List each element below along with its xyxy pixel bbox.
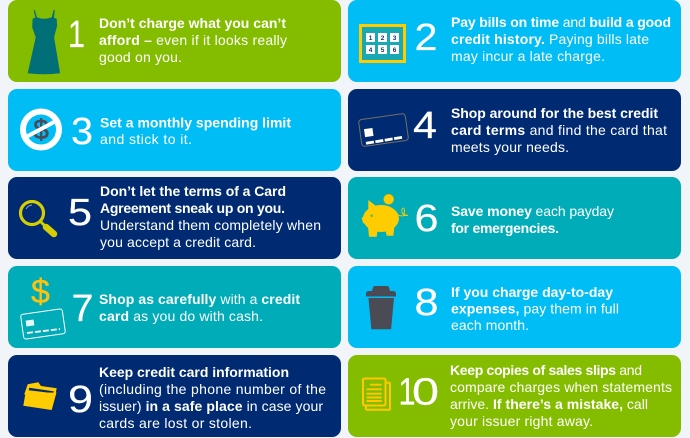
tip text 5: Understand them completely when (100, 217, 321, 233)
icon: keypad: 4 (369, 47, 373, 54)
tip text 9: Keep credit card information (99, 364, 289, 380)
tip text 8 (451, 284, 619, 333)
icon: folder (23, 382, 57, 410)
icon: dollar sign and credit card (20, 273, 66, 339)
tip text 8: each month. (451, 317, 529, 333)
card background navy (348, 89, 681, 171)
tip text 10: your issuer right away. (450, 413, 593, 429)
icon: keypad: 5 (381, 47, 385, 54)
tip text 1: Don’t charge what you can’t (99, 15, 286, 31)
panel: tip 5 (8, 177, 341, 259)
tip text 7: card as you do with cash. (99, 308, 263, 324)
icon: no dollar sign: $ (33, 114, 49, 145)
icon: keypad: 6 (393, 47, 397, 54)
tip text 10: arrive. If there’s a mistake, call (450, 396, 648, 412)
tip text 3 (100, 114, 291, 147)
icon: keypad: 2 (381, 35, 385, 42)
tip text 2 (451, 14, 671, 64)
number 1: 1 (68, 14, 85, 56)
number 10 (398, 372, 439, 414)
tip text 10: Keep copies of sales slips and (450, 362, 642, 378)
number 2: 2 (414, 17, 438, 59)
number 3: 3 (71, 111, 93, 153)
icon: dress (28, 10, 60, 74)
card background teal (8, 266, 341, 348)
tip text 1: good on you. (99, 49, 182, 65)
tip text 5: Don’t let the terms of a Card (100, 183, 286, 199)
tip text 1 (99, 15, 287, 65)
panel: tip 10 (348, 355, 681, 437)
card background navy (8, 355, 341, 437)
tip text 4: card terms and find the card that (451, 122, 667, 138)
tip text 3: and stick to it. (100, 131, 192, 147)
tip text 8: expenses, pay them in full (451, 300, 619, 316)
tip text 5: Agreement sneak up on you. (100, 200, 285, 216)
tip text 2: may incur a late charge. (451, 48, 605, 64)
icon: piggy bank with coin (362, 194, 408, 237)
tip text 4 (451, 105, 667, 155)
panel: tip 3 (8, 89, 341, 171)
number 4: 4 (413, 105, 437, 147)
card background blue (8, 89, 341, 171)
tip text 9 (99, 364, 326, 431)
tip text 10: compare charges when statements (450, 379, 672, 395)
number 6: 6 (414, 198, 438, 240)
panel: tip 7 (8, 266, 341, 348)
tip text 5: you accept a credit card. (100, 234, 256, 250)
tip text 2: credit history. Paying bills late (451, 31, 649, 47)
number 8: 8 (414, 282, 438, 324)
number 9: 9 (68, 379, 93, 421)
icon: credit card outline (358, 113, 409, 147)
tip text 1: afford – even if it looks really (99, 32, 287, 48)
icon: coffee cup (366, 286, 396, 329)
tip text 8: If you charge day-to-day (451, 284, 613, 300)
panel: tip 4 (348, 89, 681, 171)
panel: tip 2 (348, 0, 681, 82)
tip text 7: Shop as carefully with a credit (99, 291, 300, 307)
icon: keypad: 3 (393, 35, 397, 42)
card background green (8, 0, 341, 82)
panel: tip 1 (8, 0, 341, 82)
icon: no dollar sign (23, 112, 59, 148)
tip text 10 (450, 362, 672, 429)
number 5: 5 (68, 192, 92, 234)
tip text 6: Save money each payday (451, 203, 614, 219)
tip text 9: (including the phone number of the (99, 381, 326, 397)
tip text 9: cards are lost or stolen. (99, 415, 252, 431)
tip text 6 (451, 203, 614, 236)
icon: keypad (359, 24, 406, 63)
card background navy (8, 177, 341, 259)
card background blue (348, 266, 681, 348)
tip text 2: Pay bills on time and build a good (451, 14, 671, 30)
panel: tip 8 (348, 266, 681, 348)
icon: keypad: 1 (369, 35, 373, 42)
card background green (348, 355, 681, 437)
icon: dollar sign and credit card: $ (31, 273, 50, 311)
number 7: 7 (72, 288, 94, 330)
panel: tip 9 (8, 355, 341, 437)
tip text 3: Set a monthly spending limit (100, 114, 291, 130)
panel: tip 6 (348, 177, 681, 259)
card background blue (348, 0, 681, 82)
tip text 4: Shop around for the best credit (451, 105, 658, 121)
tip text 7 (99, 291, 300, 324)
icon: magnifying glass (20, 202, 54, 234)
number 10: 1 (398, 372, 416, 414)
number 10: 0 (412, 372, 439, 414)
card background teal (348, 177, 681, 259)
icon: stacked documents (363, 378, 390, 410)
tip text 5 (100, 183, 321, 250)
tip text 6: for emergencies. (451, 220, 559, 236)
tip text 9: issuer) in a safe place in case your (99, 398, 323, 414)
tip text 4: meets your needs. (451, 139, 569, 155)
